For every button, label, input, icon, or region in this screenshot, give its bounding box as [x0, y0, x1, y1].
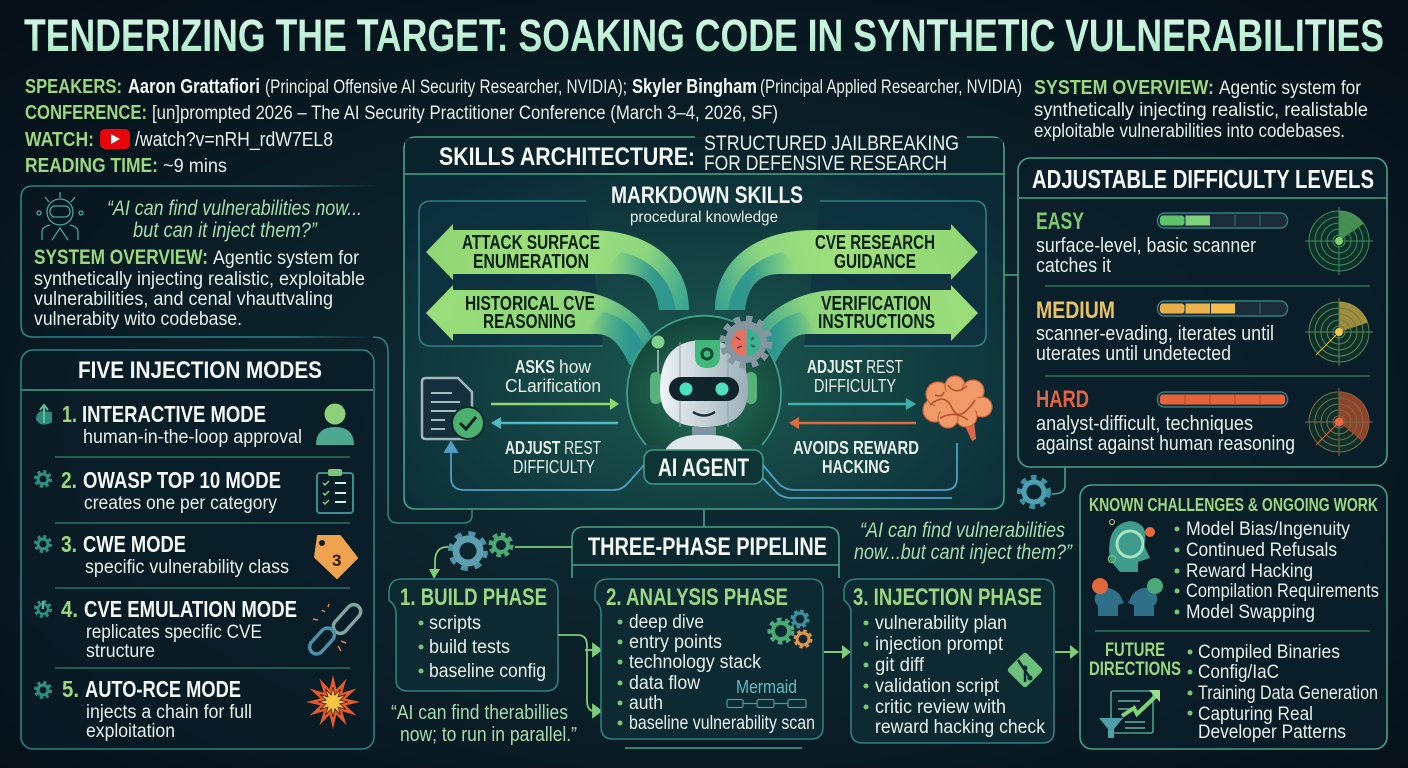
- level: medium: scanner-evading, iterates until: [1036, 323, 1274, 345]
- right skill arrows: [715, 224, 978, 365]
- icon: clipboard: [317, 469, 353, 513]
- phase 3: injection: critic review with: [875, 697, 1006, 718]
- heading: [439, 132, 959, 175]
- flow labels right: [793, 357, 919, 477]
- mode 5: AUTO-RCE MODE: [85, 676, 241, 702]
- phase 3: injection: [844, 579, 1054, 743]
- arrow: injection to future: [1055, 645, 1079, 659]
- icon: hand up arrow: [36, 405, 52, 425]
- talk metadata: /watch?v=nRH_rdW7EL8: [135, 129, 333, 151]
- markdown heading: procedural knowledge: [630, 209, 778, 226]
- mode 3: specific vulnerability class: [85, 557, 289, 578]
- heading: SKILLS ARCHITECTURE:: [439, 143, 695, 171]
- level: hard: against against human reasoning: [1036, 433, 1295, 455]
- agent label: AI AGENT: [658, 454, 749, 482]
- icon: heads: [1092, 520, 1163, 616]
- system overview top right: [1034, 77, 1368, 142]
- system overview top right: SYSTEM OVERVIEW:: [1034, 77, 1214, 99]
- panel: three-phase pipeline: [389, 519, 1073, 748]
- heading: future directions: [1089, 640, 1181, 680]
- talk metadata: CONFERENCE:: [25, 102, 147, 124]
- icon: explosion: [306, 675, 360, 729]
- list: challenges: Compilation Requirements: [1186, 581, 1379, 602]
- markdown heading: [611, 182, 803, 226]
- flow labels left: ADJUST REST: [505, 438, 601, 458]
- talk metadata: ~9 mins: [163, 156, 227, 177]
- icon: git diamond: [1007, 652, 1043, 688]
- mode 5: exploitation: [86, 721, 175, 742]
- list: future directions: Compiled Binaries: [1198, 642, 1340, 663]
- radar: easy: [1305, 207, 1373, 275]
- mermaid diagram: Mermaid: [736, 677, 797, 697]
- mode 3: 3.: [61, 531, 77, 557]
- flow labels right: ADJUST REST: [807, 357, 903, 377]
- level: easy: surface-level, basic scanner: [1036, 235, 1256, 257]
- arrow labels: INSTRUCTIONS: [818, 311, 935, 333]
- mode 2: [36, 467, 353, 514]
- mode 3: CWE MODE: [83, 531, 186, 557]
- list: future directions: Developer Patterns: [1198, 722, 1346, 743]
- overview text: vulnerabilities, and cenal vhauttvaling: [34, 289, 333, 310]
- mode 1: INTERACTIVE MODE: [82, 401, 266, 427]
- icon: gear clock: [36, 601, 50, 616]
- talk metadata: SPEAKERS:: [25, 76, 122, 98]
- arrow labels: ENUMERATION: [473, 251, 589, 273]
- icon: brain: [923, 376, 992, 441]
- level: medium: [1036, 297, 1373, 366]
- mode 4: CVE EMULATION MODE: [84, 596, 297, 622]
- overview text: Agentic system for: [213, 248, 360, 269]
- mermaid diagram: [727, 677, 806, 708]
- quote top: now...but cant inject them?”: [854, 541, 1073, 564]
- arrow labels: [462, 232, 935, 333]
- mode 2: OWASP TOP 10 MODE: [83, 467, 281, 493]
- icon: document with check: [422, 378, 484, 439]
- panel: difficulty levels: [1018, 158, 1387, 467]
- left skill arrows: [426, 224, 689, 365]
- phase 1 arrows: [558, 635, 601, 717]
- arrow labels: HISTORICAL CVE: [465, 293, 595, 315]
- markdown skills box: [419, 201, 986, 346]
- overview text: vulnerabity wito codebase.: [34, 309, 242, 330]
- arrow labels: REASONING: [483, 311, 576, 333]
- icon: broken chain: [307, 602, 364, 657]
- phase 1: build: 1. BUILD PHASE: [400, 584, 547, 611]
- phase 2: analysis: 2. ANALYSIS PHASE: [606, 584, 788, 611]
- level: medium: MEDIUM: [1036, 297, 1115, 324]
- panel: quote and overview: [21, 186, 378, 337]
- overview text: SYSTEM OVERVIEW:: [34, 246, 208, 269]
- arrow labels: VERIFICATION: [821, 293, 931, 315]
- icon: gear: [36, 472, 50, 486]
- list: future directions: Training Data Generation: [1198, 683, 1378, 704]
- phase 2: analysis: [595, 579, 823, 739]
- phase 1: build: baseline config: [429, 661, 546, 682]
- talk metadata: Aaron Grattafiori: [128, 76, 260, 98]
- talk metadata: [25, 76, 1022, 177]
- return lines: [445, 442, 957, 498]
- mode 5: injects a chain for full: [86, 702, 252, 723]
- talk metadata: (Principal Offensive AI Security Researcher, NVIDIA);: [265, 77, 627, 98]
- mode 1: [36, 401, 354, 448]
- phase 1: build: scripts: [429, 613, 481, 634]
- quote top: “AI can find vulnerabilities: [860, 519, 1065, 542]
- phase 2: analysis: technology stack: [629, 652, 761, 673]
- overview text: [34, 246, 365, 330]
- quote bottom: “AI can find therabillies: [391, 702, 568, 724]
- phase 1: build: [389, 579, 558, 691]
- system overview top right: synthetically injecting realistic, realistable: [1034, 100, 1368, 121]
- level: easy: catches it: [1036, 255, 1111, 277]
- icon: tag: 3: [332, 551, 341, 570]
- quote bottom: [391, 702, 577, 746]
- level: medium: uterates until undetected: [1036, 343, 1231, 365]
- phase 2: analysis: auth: [629, 693, 663, 714]
- flow labels left: [505, 357, 601, 477]
- radar: medium: [1305, 298, 1373, 366]
- phase 3: injection: injection prompt: [875, 634, 1004, 655]
- arrow labels: ATTACK SURFACE: [462, 232, 600, 254]
- list: challenges: Reward Hacking: [1186, 561, 1313, 582]
- icon: gear with brain: [724, 320, 768, 364]
- quote: [107, 197, 362, 242]
- flow labels left: CLarification: [505, 376, 601, 396]
- mode 5: 5.: [62, 676, 79, 702]
- icon: youtube: [100, 129, 130, 149]
- mode 2: creates one per category: [84, 493, 277, 514]
- list: challenges: Model Bias/Ingenuity: [1186, 519, 1350, 540]
- level: hard: HARD: [1036, 386, 1089, 413]
- heading: future directions: FUTURE: [1105, 640, 1165, 661]
- quote: but can it inject them?”: [133, 219, 318, 242]
- talk metadata: READING TIME:: [25, 155, 158, 177]
- panel: skills architecture: [404, 132, 1004, 509]
- mode 2: 2.: [61, 467, 77, 493]
- list: challenges: Model Swapping: [1186, 602, 1315, 623]
- quote top: [854, 519, 1073, 564]
- phase 2: analysis: data flow: [629, 673, 700, 694]
- arrows to and from agent: [491, 398, 916, 429]
- icon: robot: [650, 320, 768, 452]
- level: easy: EASY: [1036, 208, 1084, 235]
- phase 3: injection: git diff: [875, 655, 925, 676]
- phase 3: injection: reward hacking check: [875, 717, 1045, 738]
- mode 4: [36, 596, 364, 662]
- phase 2: analysis: deep dive: [629, 612, 704, 633]
- level: easy: [1036, 207, 1373, 277]
- icon: funnel and growth arrow: [1099, 690, 1160, 738]
- phase 2: analysis: baseline vulnerability scan: [629, 713, 815, 734]
- flow labels right: DIFFICULTY: [814, 376, 896, 396]
- bar: hard: [1158, 392, 1288, 407]
- level: hard: [1036, 386, 1373, 456]
- flow labels left: DIFFICULTY: [513, 457, 595, 477]
- arrow labels: GUIDANCE: [834, 251, 916, 273]
- list: future directions: Config/IaC: [1198, 662, 1279, 683]
- heading: THREE-PHASE PIPELINE: [588, 533, 827, 561]
- connector lines: [373, 275, 1065, 527]
- heading: FIVE INJECTION MODES: [78, 357, 322, 384]
- panel: known challenges and future directions: [1080, 485, 1387, 749]
- radar: hard: [1305, 388, 1373, 456]
- icon: gear connector: [1021, 479, 1047, 505]
- mode 4: structure: [86, 641, 155, 662]
- heading: FOR DEFENSIVE RESEARCH: [704, 152, 947, 175]
- phase 3: injection: 3. INJECTION PHASE: [853, 584, 1042, 611]
- list: challenges: Continued Refusals: [1186, 540, 1337, 561]
- icon: pipeline gears: [429, 536, 572, 579]
- arrow: analysis to injection: [824, 645, 851, 659]
- icon: robot outline: [37, 192, 83, 240]
- heading: STRUCTURED JAILBREAKING: [704, 132, 959, 155]
- flow labels right: AVOIDS REWARD: [793, 438, 919, 458]
- mode 3: [36, 531, 357, 578]
- level: hard: analyst-difficult, techniques: [1036, 413, 1253, 435]
- agent circle: [627, 316, 781, 445]
- bar: medium: [1158, 301, 1288, 316]
- overview text: synthetically injecting realistic, exploitable: [34, 269, 365, 290]
- agent label: [644, 450, 763, 484]
- talk metadata: [un]prompted 2026 – The AI Security Practitioner Conference (March 3–4, 2026, SF): [152, 103, 778, 124]
- phase 3: injection: validation script: [875, 676, 1000, 697]
- mode 5: [36, 675, 360, 742]
- system overview top right: Agentic system for: [1219, 78, 1362, 99]
- quote bottom: now; to run in parallel.”: [400, 724, 577, 746]
- mode 4: replicates specific CVE: [86, 622, 262, 643]
- talk metadata: Skyler Bingham: [632, 76, 757, 98]
- flow labels right: HACKING: [822, 457, 890, 477]
- phase 2: analysis: entry points: [629, 632, 722, 653]
- mode 1: human-in-the-loop approval: [83, 427, 302, 448]
- panel: five injection modes: [21, 350, 374, 749]
- flow labels left: ASKS: [515, 357, 555, 377]
- talk metadata: WATCH:: [25, 129, 94, 151]
- list: challenges: [1174, 519, 1379, 623]
- bar: easy: [1158, 213, 1288, 228]
- flow labels left: how: [559, 357, 592, 377]
- icon: analysis gears: [771, 612, 810, 646]
- heading: future directions: DIRECTIONS: [1089, 659, 1181, 680]
- arrow labels: CVE RESEARCH: [815, 232, 935, 254]
- system overview top right: exploitable vulnerabilities into codebases.: [1034, 121, 1345, 142]
- talk metadata: (Principal Applied Researcher, NVIDIA): [760, 77, 1022, 98]
- list: future directions: Capturing Real: [1198, 704, 1313, 725]
- icon: gear: [36, 682, 50, 698]
- icon: person: [316, 404, 354, 445]
- markdown heading: MARKDOWN SKILLS: [611, 182, 803, 209]
- icon: tag: [315, 536, 357, 578]
- icon: gear: [36, 536, 50, 552]
- quote: “AI can find vulnerabilities now...: [107, 197, 362, 220]
- mode 1: 1.: [62, 401, 77, 427]
- mode 4: 4.: [61, 596, 78, 622]
- phase 3: injection: vulnerability plan: [875, 613, 1007, 634]
- list: future directions: [1188, 642, 1378, 743]
- phase 1: build: build tests: [429, 637, 510, 658]
